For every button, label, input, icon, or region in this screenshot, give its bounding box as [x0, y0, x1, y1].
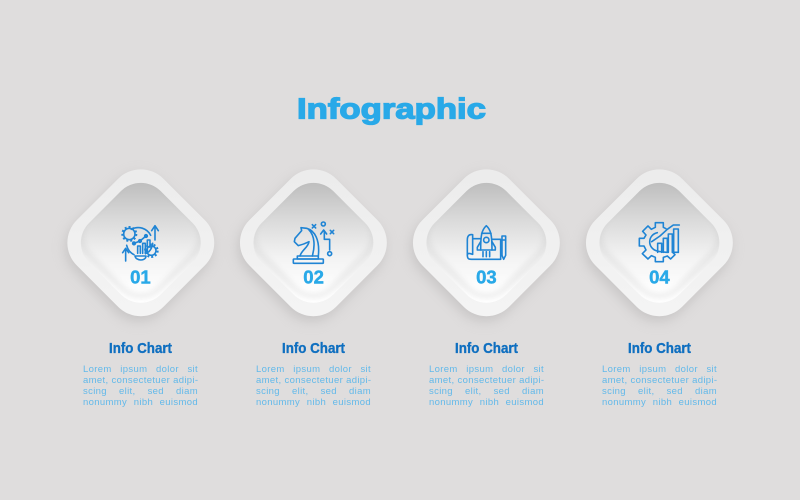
text block 2: scing elit, sed diam [256, 386, 371, 397]
text block 1: scing elit, sed diam [83, 386, 198, 397]
icon: gear with growth chart [639, 223, 679, 262]
text block 1: amet, consectetuer adipi- [83, 375, 198, 386]
number 04: 04 [649, 266, 670, 288]
heading 4: Info Chart [628, 341, 691, 357]
text block 3 [429, 364, 544, 408]
text block 1: nonummy nibh euismod [83, 397, 198, 408]
heading 2: Info Chart [282, 341, 345, 357]
card 4: diamond, icon and number [571, 156, 746, 334]
card 2: diamond, icon and number [225, 156, 400, 334]
text block 1 [83, 364, 198, 408]
text block 4 [602, 364, 717, 408]
heading 1: Info Chart [109, 341, 172, 357]
card 1: diamond, icon and number [52, 156, 227, 334]
text block 1: Lorem ipsum dolor sit [83, 364, 198, 375]
text block 3: amet, consectetuer adipi- [429, 375, 544, 386]
text block 4: amet, consectetuer adipi- [602, 375, 717, 386]
text block 4: scing elit, sed diam [602, 386, 717, 397]
icon: gears, chart and arrows [122, 226, 158, 261]
number 03: 03 [476, 266, 497, 288]
text block 2 [256, 364, 371, 408]
card 3: diamond, icon and number [398, 156, 573, 334]
text block 3: Lorem ipsum dolor sit [429, 364, 544, 375]
text block 3: nonummy nibh euismod [429, 397, 544, 408]
number 01: 01 [130, 266, 151, 288]
text block 2: nonummy nibh euismod [256, 397, 371, 408]
text block 4: Lorem ipsum dolor sit [602, 364, 717, 375]
icon: rocket on blueprint with pencil [467, 226, 506, 259]
number 02: 02 [303, 266, 324, 288]
text block 4: nonummy nibh euismod [602, 397, 717, 408]
text block 2: Lorem ipsum dolor sit [256, 364, 371, 375]
text block 2: amet, consectetuer adipi- [256, 375, 371, 386]
text block 3: scing elit, sed diam [429, 386, 544, 397]
icon: chess knight strategy [293, 222, 334, 263]
title: Infographic [297, 94, 486, 126]
heading 3: Info Chart [455, 341, 518, 357]
